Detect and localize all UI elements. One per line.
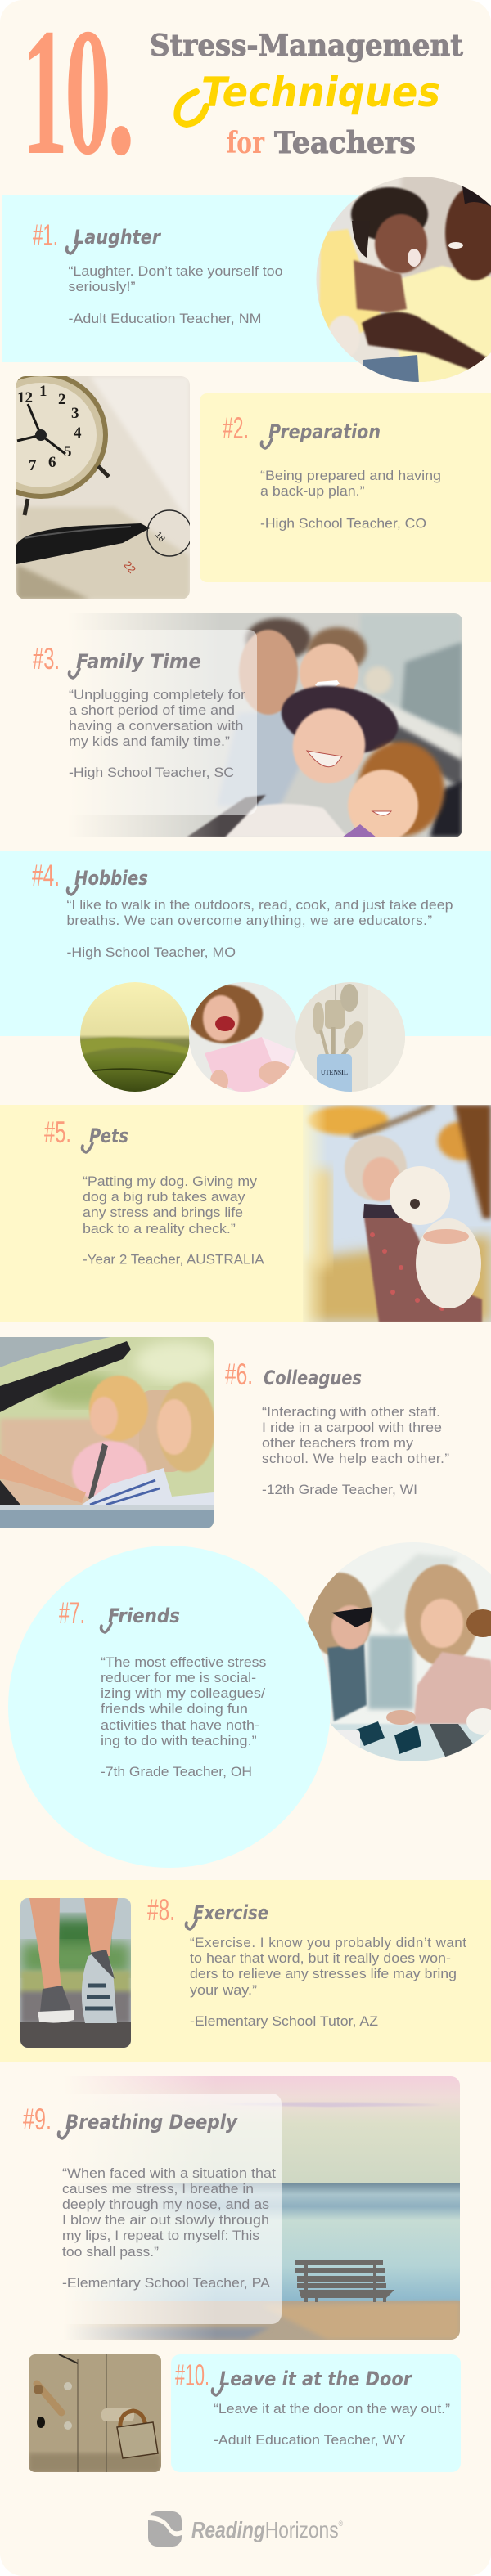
heading: Breathing Deeply [65, 2111, 238, 2134]
number: #1. [33, 218, 58, 252]
quote: back to a reality check.” [83, 1221, 236, 1236]
photo: kitchen utensils [295, 982, 405, 1095]
quote [262, 1404, 449, 1497]
text overlay [20, 2094, 282, 2324]
quote: “Patting my dog. Giving my [83, 1174, 258, 1189]
number: #2. [223, 411, 249, 445]
quote: -Year 2 Teacher, AUSTRALIA [83, 1251, 264, 1268]
number: #7. [59, 1596, 85, 1630]
quote [190, 1935, 466, 2029]
photo: green hills [80, 982, 190, 1092]
number: #8. [147, 1893, 175, 1927]
quote [214, 2401, 450, 2448]
quote [260, 468, 441, 532]
heading [101, 1604, 180, 1632]
quote: ing to do with teaching.” [101, 1733, 257, 1748]
heading line 3: for [227, 126, 265, 160]
quote [83, 1174, 264, 1268]
logo icon [148, 2511, 182, 2547]
number: #6. [225, 1358, 253, 1391]
heading: Pets [89, 1124, 128, 1147]
quote: other teachers from my [262, 1435, 414, 1451]
photo: women in a car [0, 1337, 217, 1528]
quote: “Unplugging completely for [69, 687, 246, 702]
quote: deeply through my nose, and as [62, 2197, 269, 2212]
quote: “Interacting with other staff. [262, 1404, 440, 1420]
quote: reducer for me is social- [101, 1670, 256, 1685]
photo: padlocked door [29, 2354, 161, 2472]
quote [101, 1654, 266, 1779]
heading [67, 867, 148, 895]
quote: to hear that word, but it really does won- [190, 1950, 451, 1966]
quote: seriously!” [69, 279, 136, 294]
heading: Laughter [74, 226, 162, 249]
panel: 10 leave it at the door [29, 2354, 461, 2472]
quote [69, 263, 283, 326]
logo wordmark: ® [339, 2520, 343, 2528]
quote: -High School Teacher, CO [260, 515, 426, 532]
number: #9. [23, 2103, 52, 2136]
quote: -12th Grade Teacher, WI [262, 1482, 417, 1497]
panel: 7 friends [8, 1542, 491, 1868]
heading line 3: Teachers [274, 126, 416, 160]
panel: 6 colleagues [0, 1337, 449, 1528]
photo: clock and calendar: 12 [17, 389, 33, 406]
quote: causes me stress, I breathe in [62, 2181, 254, 2197]
panel: 1 laughter [2, 172, 491, 384]
quote: ders to relieve any stresses life may bring [190, 1966, 457, 1981]
quote [62, 2165, 276, 2291]
photo: clock and calendar: 1 [39, 383, 47, 400]
photo: clock and calendar: 2 [58, 391, 65, 408]
logo wordmark: ReadingHorizons [191, 2517, 355, 2542]
quote: -Adult Education Teacher, NM [69, 311, 262, 326]
quote: “The most effective stress [101, 1654, 266, 1670]
photo: woman laughing with book [187, 982, 299, 1096]
heading: Family Time [76, 650, 201, 673]
photo: clock and calendar: 6 [48, 454, 56, 471]
quote: my kids and family time.” [69, 734, 230, 749]
heading: Colleagues [264, 1367, 362, 1389]
heading: Leave it at the Door [219, 2367, 413, 2390]
quote: breaths. We can overcome anything, we are educators.” [67, 913, 432, 928]
heading: Friends [108, 1604, 180, 1627]
quote: school. We help each other.” [262, 1451, 449, 1466]
number: #10. [175, 2358, 209, 2392]
quote: -7th Grade Teacher, OH [101, 1764, 252, 1779]
photo: friends at a cafe [303, 1542, 491, 1766]
quote: having a conversation with [69, 718, 244, 734]
photo: laughing couple [311, 172, 491, 384]
quote: “Laughter. Don’t take yourself too [69, 263, 283, 279]
quote: “Leave it at the door on the way out.” [214, 2401, 450, 2417]
photo: clock and calendar [16, 376, 190, 599]
quote: izing with my colleagues/ [101, 1685, 265, 1701]
panel: 8 exercise [0, 1880, 491, 2062]
heading [82, 1124, 128, 1152]
quote: -Elementary School Tutor, AZ [190, 2013, 378, 2029]
number: #5. [44, 1115, 71, 1149]
quote: -High School Teacher, MO [67, 945, 236, 960]
photo: bench by the sea [74, 2076, 460, 2340]
quote: “When faced with a situation that [62, 2165, 276, 2181]
quote: “Exercise. I know you probably didn’t want [190, 1935, 466, 1950]
quote [67, 897, 453, 960]
quote: activities that have noth- [101, 1717, 259, 1733]
number: #3. [33, 642, 60, 675]
photo: clock and calendar: 4 [74, 424, 82, 442]
heading: Exercise [193, 1901, 268, 1924]
photo: clock and calendar: 3 [71, 405, 79, 422]
quote: I blow the air out slowly through [62, 2212, 269, 2228]
panel: 3 family time [16, 609, 462, 842]
quote: any stress and brings life [83, 1205, 243, 1220]
quote: -Elementary School Teacher, PA [62, 2275, 271, 2291]
photo: kitchen utensils: UTENSIL [321, 1069, 348, 1076]
heading: Preparation [268, 420, 381, 443]
quote: too shall pass.” [62, 2244, 159, 2260]
photo: woman with white dog [303, 1105, 491, 1322]
panel: 4 hobbies [0, 851, 491, 1096]
heading [187, 1901, 268, 1929]
quote: “Being prepared and having [260, 468, 441, 483]
heading [262, 420, 381, 448]
quote: a short period of time and [69, 702, 235, 718]
photo: clock and calendar: 5 [64, 443, 72, 460]
quote: my lips, I repeat to myself: This [62, 2228, 259, 2243]
quote: -High School Teacher, SC [69, 765, 234, 780]
heading line 2: Techniques [201, 69, 440, 116]
panel: 9 breathing deeply [12, 2073, 460, 2343]
heading [67, 226, 162, 254]
quote: friends while doing fun [101, 1701, 248, 1717]
logo: Reading Horizons [148, 2511, 343, 2547]
quote: a back-up plan.” [260, 483, 365, 499]
photo: clock and calendar: 7 [29, 457, 37, 474]
quote: your way.” [190, 1982, 257, 1998]
photo: running shoes [20, 1898, 131, 2048]
quote: I ride in a carpool with three [262, 1420, 442, 1435]
heading line 1: Stress-Management [150, 29, 463, 63]
number: #4. [32, 859, 60, 892]
panel: 2 preparation [0, 371, 491, 599]
title [22, 0, 463, 193]
heading: Hobbies [74, 867, 148, 890]
quote [69, 687, 246, 780]
text overlay [29, 630, 257, 815]
photo: clock and calendar: 22 [121, 559, 138, 576]
quote: dog a big rub takes away [83, 1189, 246, 1205]
quote: -Adult Education Teacher, WY [214, 2432, 406, 2448]
panel: 5 pets [0, 1105, 491, 1322]
quote: “I like to walk in the outdoors, read, cook, and just take deep [67, 897, 453, 913]
photo: family [94, 613, 462, 837]
photo: clock and calendar: 18 [153, 530, 167, 544]
